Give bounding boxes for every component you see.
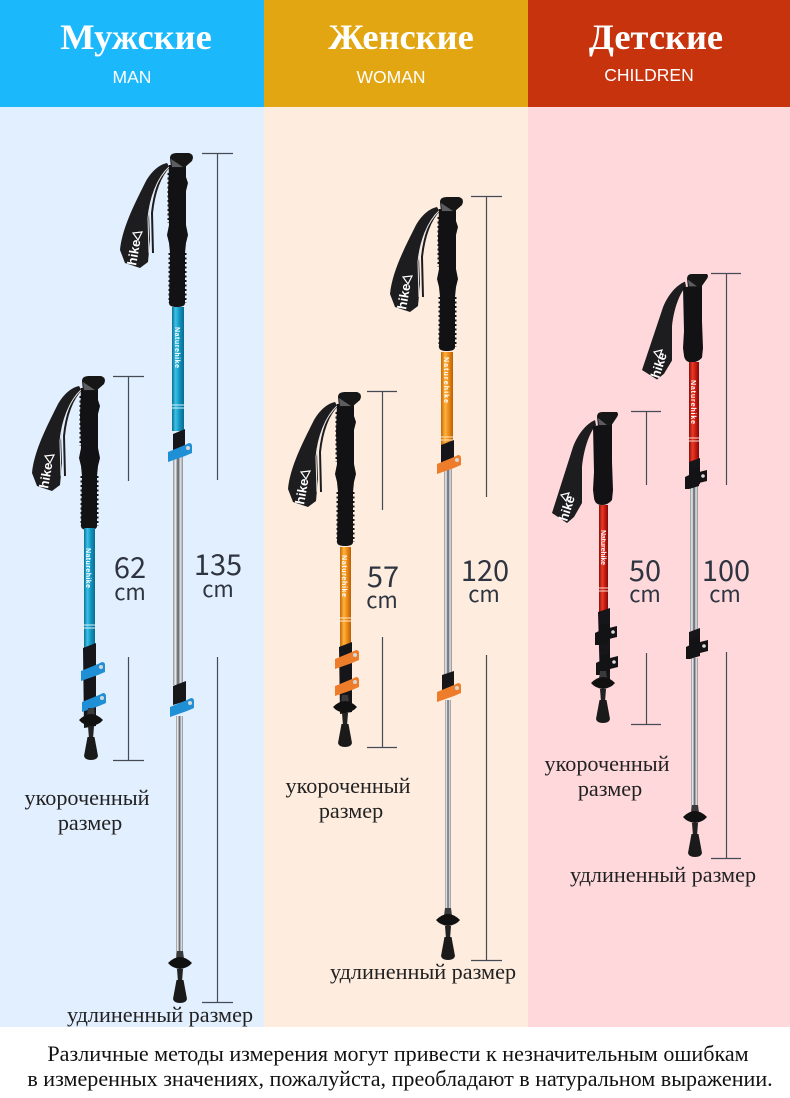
value: 120 cm: cm [468,577,500,609]
label: man long size: удлиненный размер [67,1002,253,1027]
label: children short size: укороченный [544,751,670,776]
value: 100 cm: 100 [702,548,750,590]
label: woman long size: удлиненный размер [330,959,516,984]
dimension: 135 cm [202,153,233,1003]
value: 100 cm: cm [709,577,741,609]
pole: woman extended: hike [394,282,413,311]
header: man: MAN [113,67,151,87]
value: 62 cm: cm [114,575,146,607]
pole: children short: hike [556,494,578,523]
pole: children extended [642,274,708,857]
value: 120 cm [461,548,509,609]
value: 50 cm: cm [629,577,661,609]
dimension: 57 cm [367,391,397,748]
pole: children extended: hike [648,351,670,380]
pole: man short: Naturehike [84,548,91,588]
pole: man extended: hike [124,238,143,267]
header: woman: Женские [328,17,474,57]
header: woman: WOMAN [356,67,426,87]
value: 120 cm: 120 [461,548,509,590]
pole: man extended [120,153,194,1003]
pole: woman extended: Naturehike [442,357,449,403]
value: 100 cm [702,548,750,609]
dimension: 62 cm [113,376,144,760]
value: 135 cm: cm [202,572,234,604]
value: 57 cm: cm [366,583,398,615]
header: children: Детские [589,17,723,57]
pole: woman short: hike [292,477,311,506]
value: 57 cm: 57 [367,554,399,596]
header: man [0,0,264,107]
value: 135 cm [194,542,242,604]
value: 62 cm: 62 [114,545,146,587]
footnote: Различные методы измерения могут привести к незначительным ошибкам [47,1041,749,1066]
header: children: CHILDREN [604,65,694,85]
footnote: в измеренных значениях, пожалуйста, преобладают в натуральном выражении. [27,1066,773,1091]
pole: woman extended [390,197,463,960]
label: man short size: размер [58,810,122,835]
pole: man extended: Naturehike [173,327,180,368]
pole: children short [552,412,618,723]
dimension: 100 cm [711,273,741,858]
label: children short size: размер [578,776,642,801]
value: 50 cm [629,548,661,609]
panel: man [0,107,264,1027]
value: 62 cm [114,545,146,607]
label: man short size: укороченный [24,785,150,810]
label: children long size: удлиненный размер [570,862,756,887]
pole: woman short: Naturehike [340,555,347,597]
pole: woman short [288,392,361,747]
pole: man short: hike [36,461,55,490]
panel: woman [264,107,528,1027]
panel: children [528,107,790,1027]
value: 50 cm: 50 [629,548,661,590]
header: man: Мужские [60,17,212,57]
value: 135 cm: 135 [194,542,242,584]
label: woman short size: укороченный [286,773,410,798]
header: children [528,0,790,107]
pole: man short [32,376,106,760]
pole: children extended: Naturehike [689,380,696,424]
dimension: 50 cm [631,411,661,724]
value: 57 cm [366,554,399,615]
label: woman short size: размер [319,798,383,823]
pole: children short: Naturehike [599,530,606,565]
header: woman [264,0,528,107]
dimension: 120 cm [471,196,502,960]
